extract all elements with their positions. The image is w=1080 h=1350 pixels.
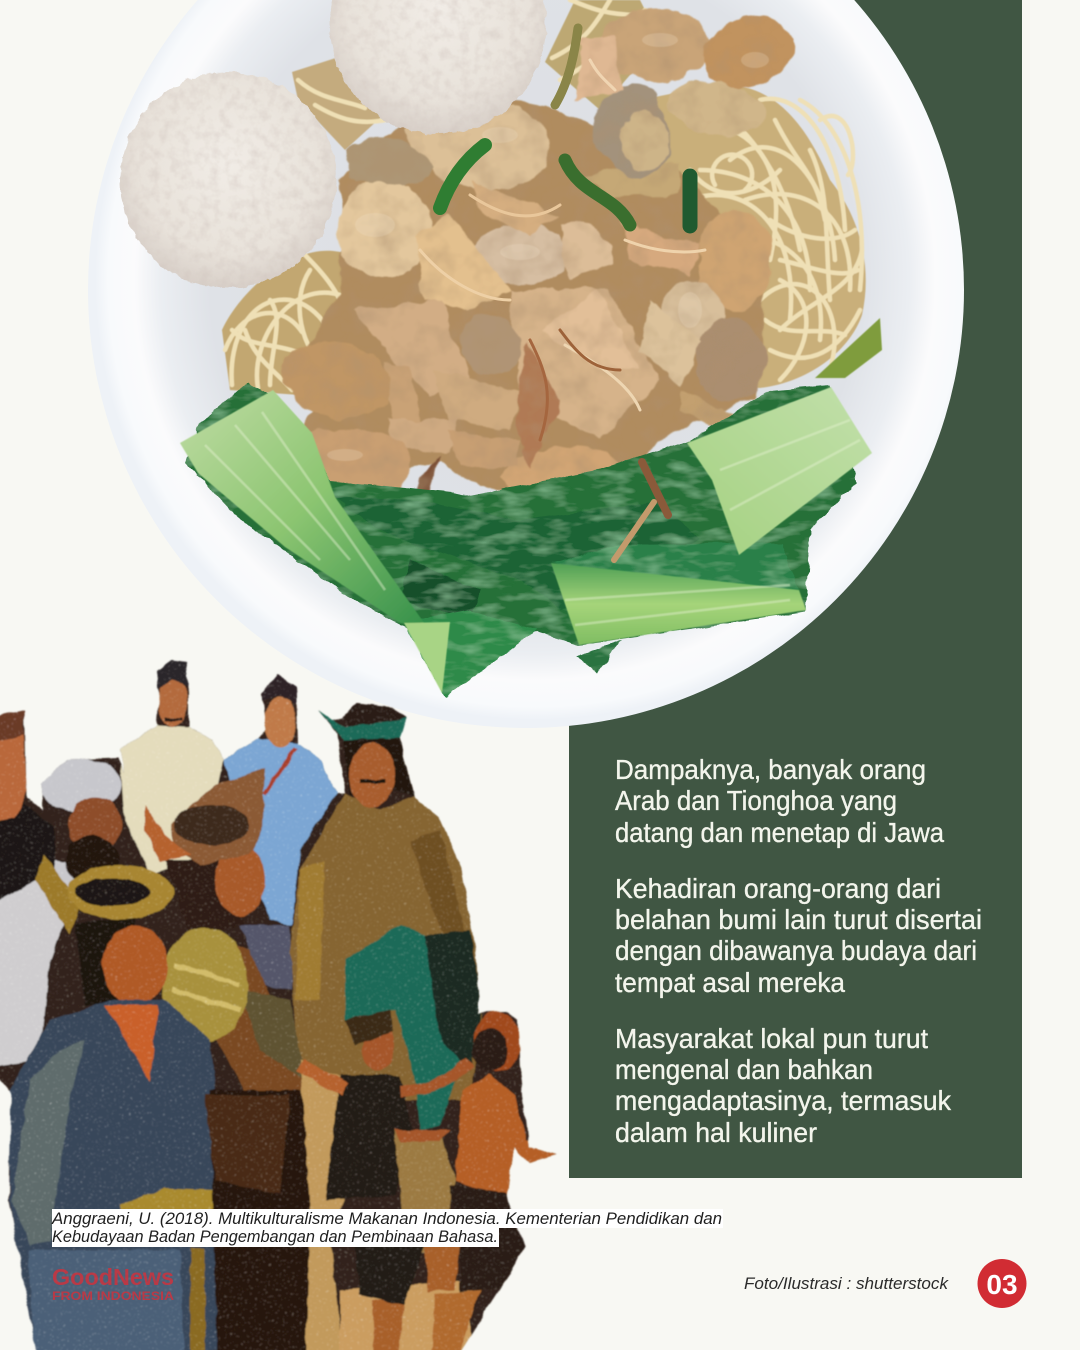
logo: GoodNews from Indonesia: FROM INDONESIA bbox=[52, 1291, 174, 1303]
figure: dark centre cloak bbox=[205, 1090, 312, 1350]
panel: green text background bbox=[569, 0, 1022, 1178]
paragraph 1: Dampaknya, banyak orang bbox=[615, 754, 926, 785]
figure: far left man bbox=[0, 710, 56, 905]
green onions bbox=[385, 28, 690, 226]
source citation bbox=[51, 1209, 723, 1247]
body text bbox=[615, 754, 982, 1148]
figure: man in white shirt bbox=[120, 660, 223, 875]
paragraph 2: dengan dibawanya budaya dari bbox=[615, 935, 977, 966]
logo: GoodNews from Indonesia bbox=[52, 1264, 174, 1303]
chicken and mushroom pile bbox=[275, 4, 803, 525]
paragraph 1: Arab dan Tionghoa yang bbox=[615, 785, 897, 816]
paragraph 3 bbox=[615, 1023, 951, 1148]
page number badge: 03 bbox=[986, 1269, 1018, 1300]
bowl bbox=[88, 0, 964, 728]
paragraph 2: Kehadiran orang-orang dari bbox=[615, 873, 941, 904]
greens: leaves bbox=[186, 382, 856, 697]
noodles bbox=[222, 0, 866, 395]
figure: man in blue shirt bbox=[223, 675, 336, 990]
figure: turbaned bearded man bbox=[0, 758, 124, 1067]
crisp shallots bbox=[515, 340, 560, 470]
paragraph 1: datang dan menetap di Jawa bbox=[615, 817, 945, 848]
paragraph 3: dalam hal kuliner bbox=[615, 1117, 817, 1148]
greens: stalks bbox=[180, 318, 882, 693]
figure: front man in blue-grey robe bbox=[10, 855, 310, 1350]
paragraph 2: tempat asal mereka bbox=[615, 967, 846, 998]
figure: man in brown robe and teal headband bbox=[290, 703, 482, 1100]
crispy garnish on greens bbox=[614, 462, 668, 560]
fried shallot strands bbox=[420, 60, 705, 440]
page number badge bbox=[978, 1259, 1026, 1308]
figure: man in brown hat bbox=[145, 768, 265, 935]
paragraph 2 bbox=[615, 873, 982, 998]
photo credit: Foto/Ilustrasi : shutterstock bbox=[744, 1274, 949, 1293]
chicken highlights bbox=[327, 33, 769, 461]
source citation: Anggraeni, U. (2018). Multikulturalisme Makanan Indonesia. Kementerian Pendidikan dan bbox=[51, 1210, 722, 1228]
meatballs bbox=[120, 0, 546, 288]
beige ground strip bbox=[300, 1060, 480, 1350]
source citation: Kebudayaan Badan Pengembangan dan Pembinaan Bahasa. bbox=[52, 1228, 498, 1246]
paragraph 3: mengadaptasinya, termasuk bbox=[615, 1085, 951, 1116]
paragraph 3: Masyarakat lokal pun turut bbox=[615, 1023, 928, 1054]
paragraph 3: mengenal dan bahkan bbox=[615, 1054, 873, 1085]
logo: GoodNews from Indonesia: GoodNews bbox=[52, 1264, 174, 1290]
painting speckle bbox=[0, 650, 570, 1350]
paragraph 1 bbox=[615, 754, 945, 848]
figure: shirtless boy bbox=[450, 1012, 557, 1292]
figure: small child and teal cloth bbox=[300, 925, 482, 1305]
paragraph 2: belahan bumi lain turut disertai bbox=[615, 904, 982, 935]
photo: bowl of mie ayam bbox=[88, 0, 964, 728]
painting: Arab and Chinese settlers bbox=[0, 650, 570, 1350]
